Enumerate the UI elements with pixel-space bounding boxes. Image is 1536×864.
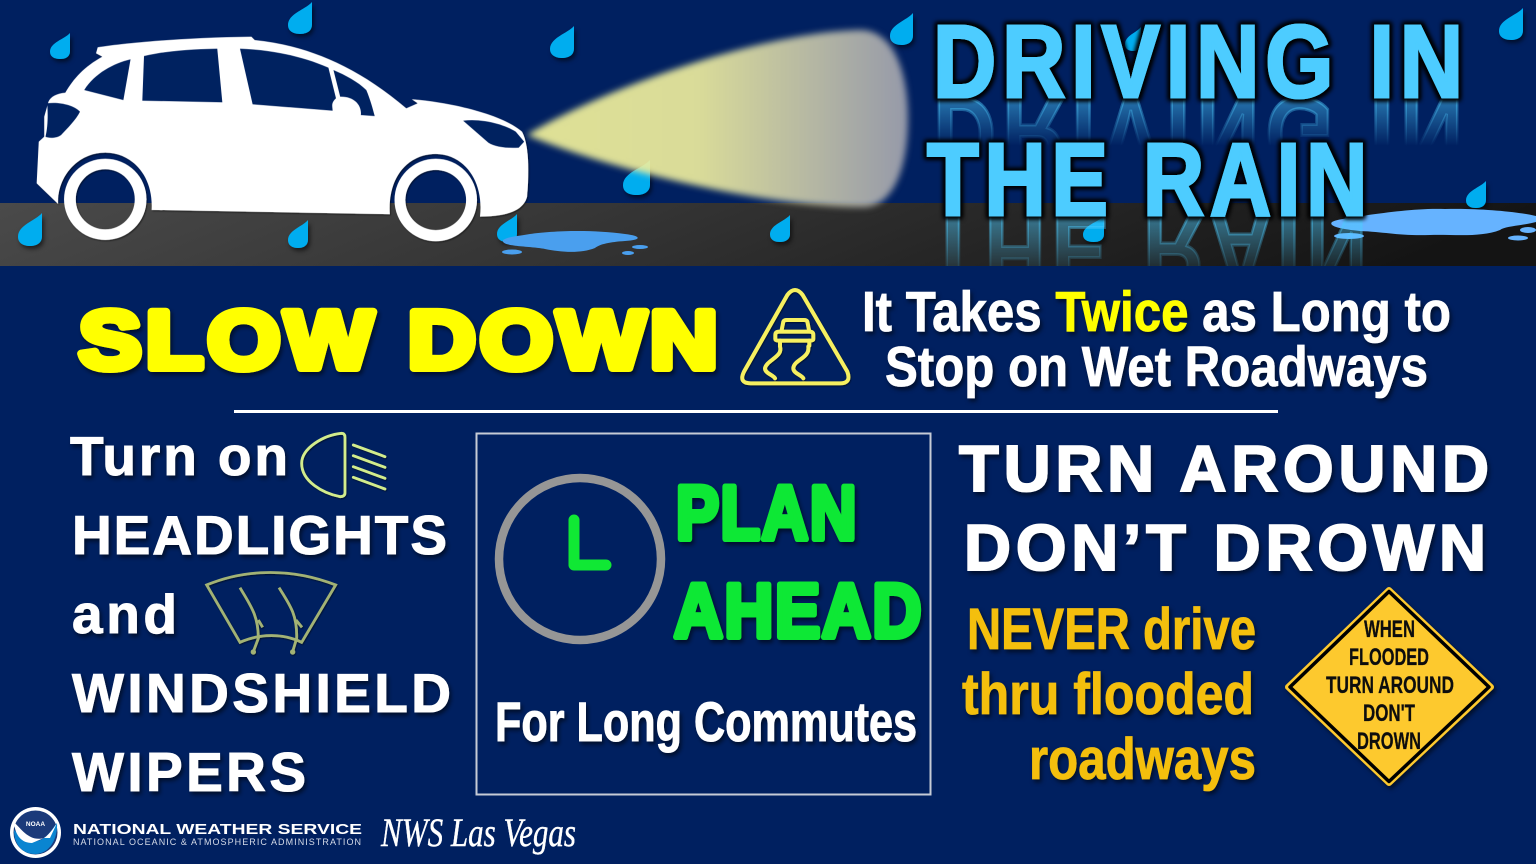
icon: slippery road warning — [742, 290, 848, 383]
puddle right — [1331, 209, 1536, 240]
car silhouette — [37, 37, 528, 241]
ahead text: AHEAD — [674, 569, 923, 654]
line 2: thru flooded — [962, 662, 1254, 727]
line 1: It Takes Twice as Long to — [862, 280, 1451, 344]
never drive message — [962, 597, 1256, 792]
sign text: FLOODED — [1349, 644, 1429, 671]
slow down heading: SLOW DOWN — [79, 295, 722, 386]
title — [921, 18, 1464, 266]
line 1: NEVER drive — [967, 597, 1256, 662]
for long commutes: For Long Commutes — [495, 690, 917, 753]
sign text: DROWN — [1357, 728, 1421, 755]
noaa logo — [10, 807, 61, 858]
headlights: HEADLIGHTS — [72, 504, 447, 566]
sign text: WHEN — [1364, 616, 1415, 643]
puddle left — [502, 231, 648, 255]
title line 2: THE RAIN — [927, 122, 1373, 237]
title reflection: the rain: THE RAIN — [927, 194, 1373, 309]
turn on: Turn on — [70, 425, 288, 487]
icon: headlight — [302, 433, 385, 497]
icon: clock — [499, 478, 661, 640]
line 1: TURN AROUND — [959, 432, 1489, 505]
noaa initials: NOAA — [26, 821, 45, 828]
wipers: WIPERS — [72, 741, 306, 803]
nws las vegas signature: NWS Las Vegas — [380, 810, 576, 855]
icon: windshield wipers — [207, 572, 336, 655]
sign text: DON'T — [1363, 700, 1415, 727]
line 3: roadways — [1029, 727, 1256, 792]
line 2: NATIONAL OCEANIC & ATMOSPHERIC ADMINISTRATION — [73, 837, 361, 847]
rain drops — [18, 2, 1523, 248]
line 2: Stop on Wet Roadways — [885, 335, 1428, 399]
stopping distance message — [862, 280, 1451, 399]
national weather service wordmark — [73, 822, 362, 847]
headlight beam — [527, 30, 908, 207]
turn around heading — [959, 432, 1489, 584]
panel: plan ahead — [476, 434, 930, 794]
panel border — [476, 434, 930, 794]
road band — [0, 203, 1536, 266]
line 2: DON’T DROWN — [964, 511, 1486, 584]
windshield: WINDSHIELD — [72, 662, 451, 724]
line 1: NATIONAL WEATHER SERVICE — [73, 822, 362, 838]
flood warning sign — [1288, 590, 1491, 783]
and: and — [72, 583, 177, 645]
plan text: PLAN — [676, 471, 858, 556]
headlights and wipers text — [70, 425, 451, 803]
sign text: TURN AROUND — [1326, 672, 1454, 699]
sign text — [1326, 616, 1454, 755]
